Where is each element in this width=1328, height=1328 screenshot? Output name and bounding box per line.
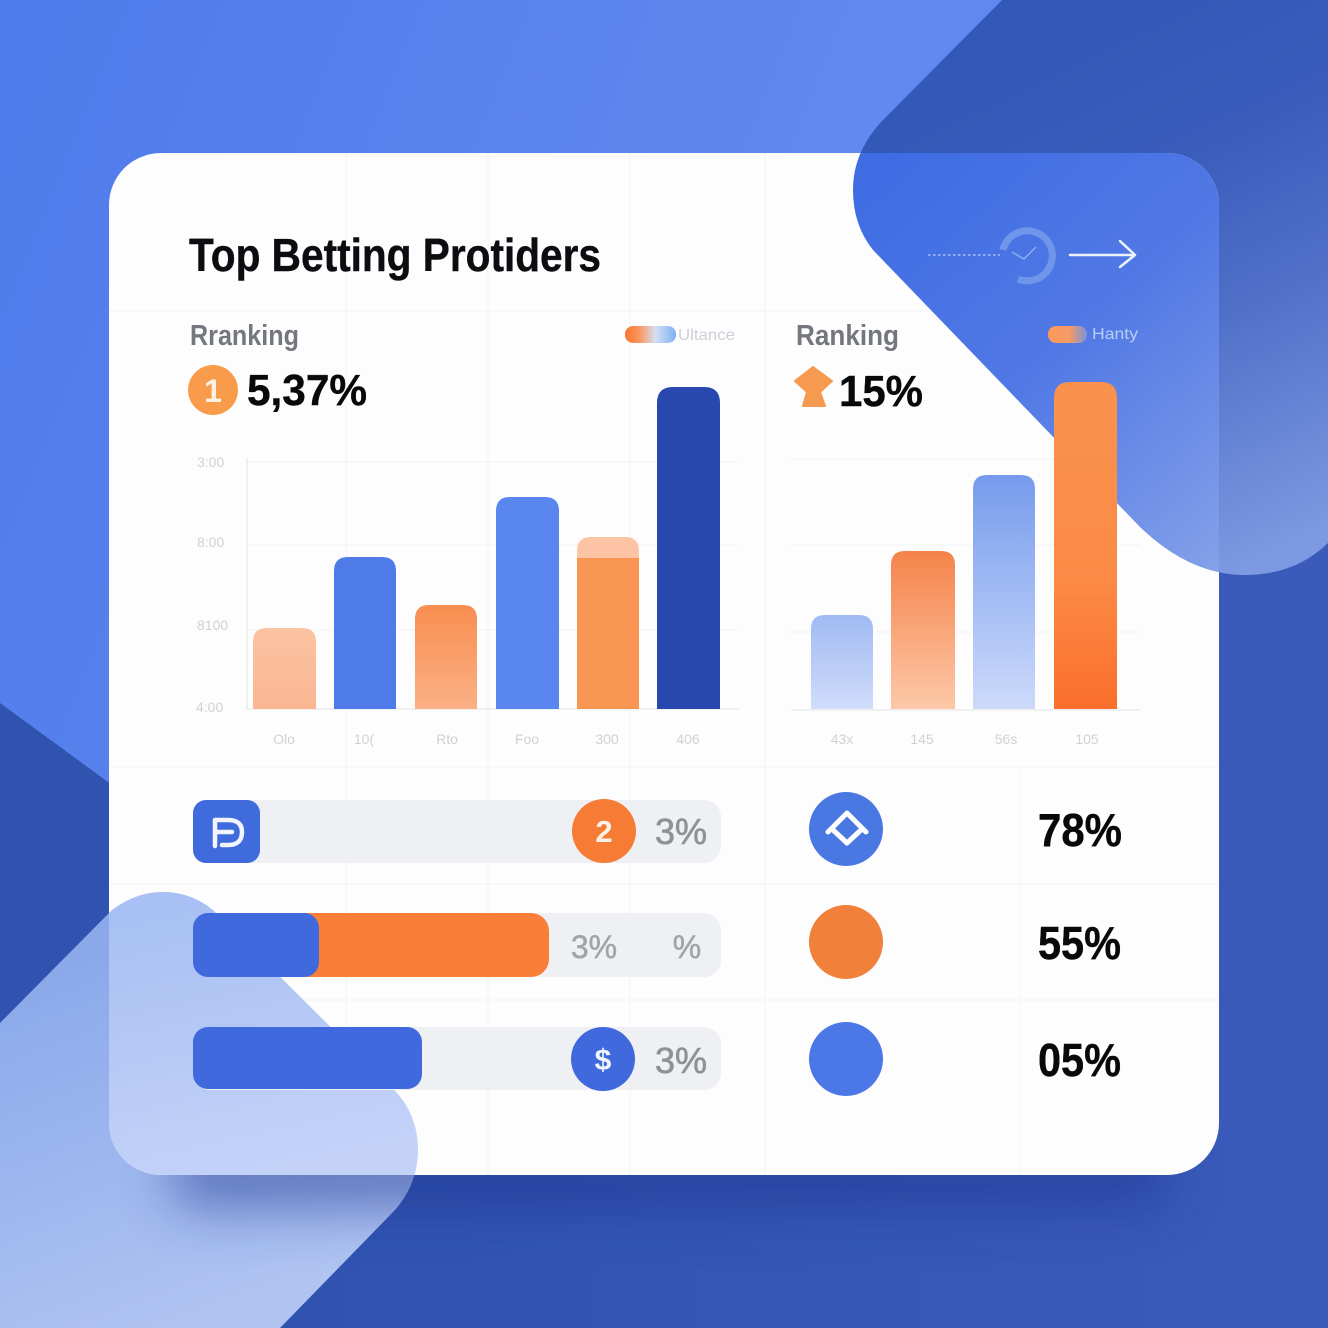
heading: right ranking: Ranking [796, 320, 899, 352]
decorative shape: bottom left overlay on card [109, 892, 418, 1175]
x axis labels [831, 731, 1099, 747]
y axis labels: 8:00 [197, 534, 224, 550]
right row 2 [809, 905, 1121, 979]
icon: blue dot [809, 1022, 883, 1096]
badge: rank 2: 2 [595, 814, 613, 849]
value: right ranking percent: 15% [839, 367, 923, 416]
bar 4 [496, 497, 559, 709]
x axis labels: Olo [273, 731, 295, 747]
bar chart: right [791, 382, 1141, 747]
x axis labels: 105 [1075, 731, 1099, 747]
icon: arrow [1070, 241, 1135, 267]
y axis labels: 8100 [197, 617, 228, 633]
x axis labels [273, 731, 700, 747]
value: 05% [1038, 1034, 1121, 1086]
value: 3% [655, 1040, 707, 1081]
heading: left ranking: Rranking [190, 320, 299, 352]
icon: orange house badge [795, 367, 832, 406]
icon: provider logo [193, 800, 260, 863]
legend: left chart [625, 326, 735, 344]
y axis labels: 4:00 [196, 699, 223, 715]
decorative shape: top right backdrop [853, 0, 1328, 575]
icon: rank one badge: 1 [204, 373, 222, 409]
value: 3% [571, 929, 617, 965]
icon: rank one badge [188, 365, 238, 415]
x axis labels: 300 [595, 731, 619, 747]
bar 2 [334, 557, 396, 709]
y axis labels [196, 454, 228, 715]
x axis labels: 43x [831, 731, 853, 747]
x axis labels: Rto [436, 731, 458, 747]
row 1: progress track [193, 799, 721, 863]
bar 6 [657, 387, 720, 709]
legend: right chart [1048, 326, 1138, 343]
bar 5 [577, 537, 639, 709]
bar 3 [973, 475, 1035, 709]
value: 3% [655, 811, 707, 852]
badge: dollar [571, 1027, 635, 1091]
badge: dollar: $ [595, 1044, 612, 1077]
bar 1 [811, 615, 873, 709]
row 3: progress track [193, 1027, 721, 1091]
bar 2 [891, 551, 955, 709]
x axis labels: 56s [995, 731, 1017, 747]
title: Top Betting Protiders [189, 229, 601, 281]
y axis labels: 3:00 [197, 454, 224, 470]
badge: rank 2 [572, 799, 636, 863]
bar 3 [415, 605, 477, 709]
right row 1 [809, 792, 1122, 866]
x axis labels: 406 [676, 731, 700, 747]
x axis labels: 145 [910, 731, 934, 747]
bar 1 [253, 628, 316, 709]
decorative shape: top right overlay on card [853, 153, 1219, 572]
legend: left chart: Ultance [678, 327, 735, 344]
bar chart: left [196, 387, 739, 747]
card shadow [170, 1135, 1170, 1210]
x axis labels: Foo [515, 731, 539, 747]
value: 55% [1038, 917, 1121, 969]
icon: diamond [809, 792, 883, 866]
blue fill [193, 1027, 422, 1089]
panel: main card [109, 153, 1219, 1175]
right row 3 [809, 1022, 1121, 1096]
value glyph: % [673, 929, 701, 965]
decorative shape: bottom left backdrop [0, 892, 418, 1328]
value: 78% [1038, 804, 1122, 856]
icon: progress ring with dotted line [928, 231, 1052, 281]
bar 4 [1054, 382, 1117, 709]
orange fill [280, 913, 549, 977]
icon: orange dot [809, 905, 883, 979]
panel: left ranking header [188, 320, 735, 415]
panel: right ranking header [795, 320, 1138, 416]
legend: right chart: Hanty [1092, 326, 1138, 343]
x axis labels: 10( [354, 731, 374, 747]
value: left ranking percent: 5,37% [247, 366, 367, 415]
row 2: progress track [193, 913, 721, 977]
blue fill [193, 913, 319, 977]
